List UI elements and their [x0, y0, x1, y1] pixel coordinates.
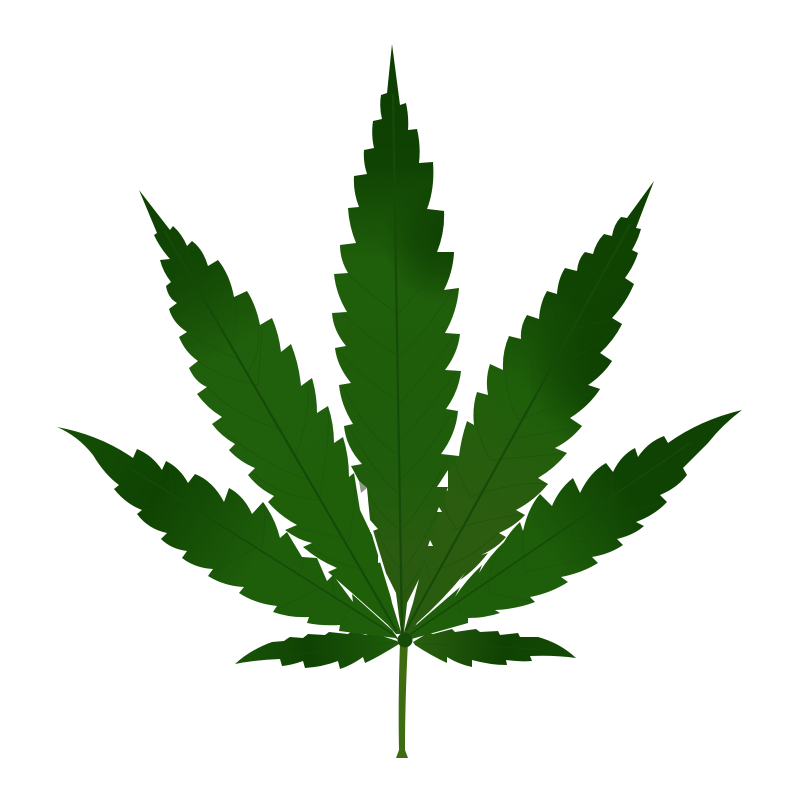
shading: center leaflet dark patch: [332, 44, 461, 634]
veins: lower right: [410, 520, 577, 635]
veins: upper right: [406, 225, 630, 630]
leaflet: bottom left small: [235, 631, 399, 669]
leaflet: upper left: [139, 190, 402, 634]
joint: [398, 632, 412, 648]
veins: upper left: [165, 232, 396, 630]
leaflet: lower right: [408, 410, 742, 640]
leaflet: center: [332, 44, 461, 634]
mark: grey triangle: [359, 481, 367, 493]
veins: lower left: [130, 462, 396, 636]
gaps between overlapping leaflets: [370, 470, 448, 632]
leaflet: bottom right small: [413, 629, 576, 667]
shading: upper right leaflet dark patch: [404, 181, 654, 636]
illustration: cannabis leaf: [57, 44, 742, 758]
leaflet: lower left: [57, 427, 399, 640]
stem: [396, 642, 408, 758]
veins: center: [342, 94, 428, 633]
leaflet: upper right: [404, 181, 654, 636]
